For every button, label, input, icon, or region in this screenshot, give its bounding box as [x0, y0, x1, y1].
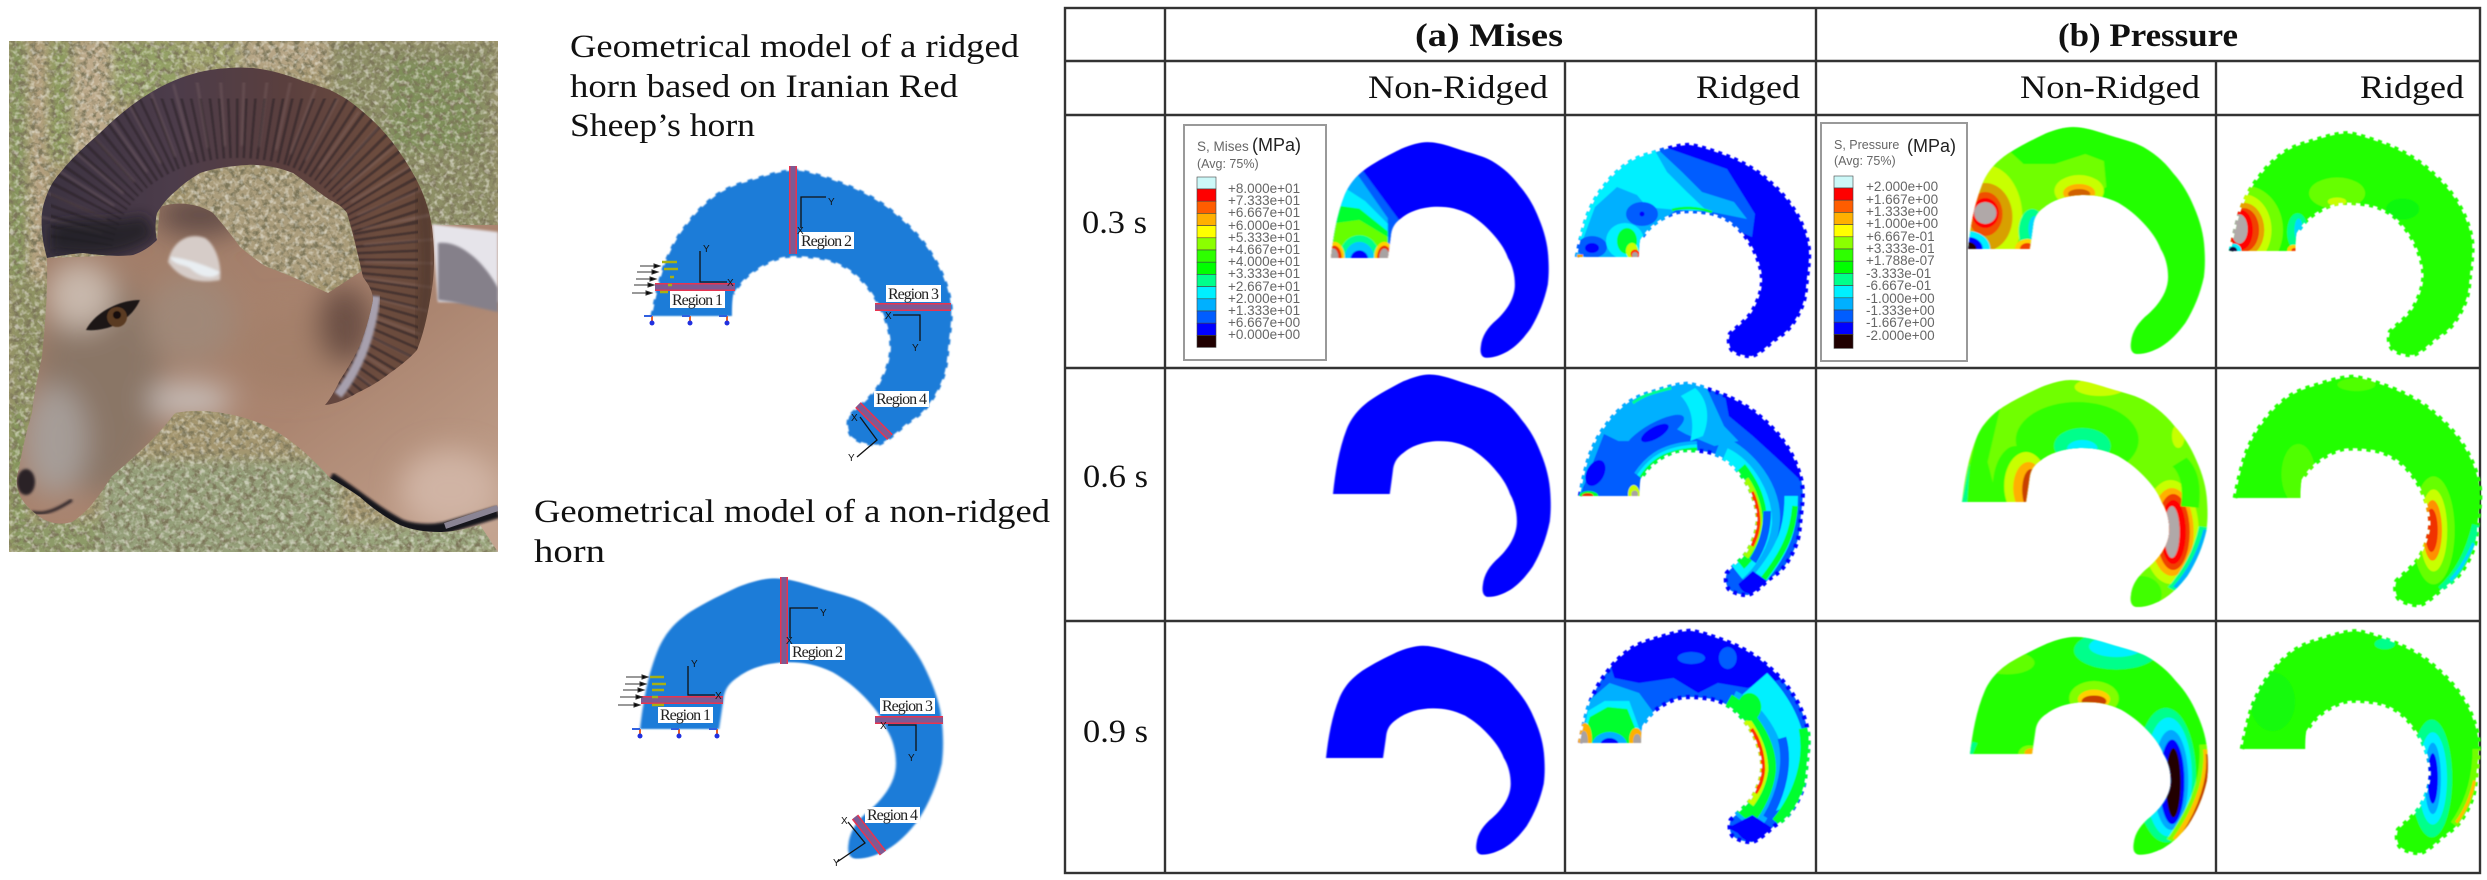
contour: Mises ridged 0.9 s — [1578, 627, 1809, 842]
grey-white back patch — [438, 243, 498, 312]
region labels: Region 1 — [660, 707, 711, 724]
contour: Mises non-ridged 0.6 s — [1333, 374, 1551, 597]
scale values: +6.667e+00 — [1228, 315, 1300, 330]
scale values: +0.000e+00 — [1228, 327, 1300, 342]
table grid — [1065, 8, 2480, 873]
scale values: +1.667e+00 — [1866, 192, 1938, 207]
legend: Mises: (Avg: 75%) — [1197, 157, 1259, 171]
local axes — [700, 197, 920, 457]
contour: Pressure ridged 0.9 s — [2242, 631, 2479, 853]
region cut bars — [641, 577, 943, 853]
scale values — [1866, 179, 1938, 343]
region cut bars — [655, 166, 951, 437]
contour: Pressure ridged 0.3 s — [2208, 133, 2472, 355]
scale values: +5.333e+01 — [1228, 230, 1300, 245]
scale values: -6.667e-01 — [1866, 278, 1931, 293]
contour: Mises ridged 0.3 s — [1571, 142, 1809, 356]
boundary symbols — [660, 262, 678, 292]
contour: Mises non-ridged 0.3 s — [1324, 142, 1549, 358]
colour scale — [1834, 176, 1853, 348]
row label: 0.6 s: 0.6 s — [1083, 459, 1148, 495]
legend: Mises: (MPa) — [1252, 135, 1301, 155]
geometrical model: non-ridged horn: X — [880, 721, 887, 732]
geometrical model: ridged horn — [632, 166, 951, 464]
geometrical model: non-ridged horn: Y — [908, 753, 915, 764]
local axes — [688, 608, 916, 862]
contour: Pressure ridged 0.6 s — [2235, 377, 2480, 605]
scale values — [1228, 181, 1300, 342]
geometrical model: non-ridged horn: X — [841, 816, 848, 827]
region labels: Region 4 — [876, 391, 927, 408]
contour: Pressure non-ridged 0.9 s — [1970, 631, 2208, 855]
caption: non-ridged horn: Geometrical model of a non-ridged — [534, 494, 1051, 530]
legend: Pressure: S, Pressure — [1834, 138, 1899, 152]
geometrical model: ridged horn: Y — [828, 197, 835, 208]
ridged horn shape — [652, 170, 951, 445]
geometrical model: ridged horn: Y — [912, 343, 919, 354]
region labels — [670, 232, 941, 408]
geometrical model: non-ridged horn: X — [786, 636, 793, 647]
scale values: +1.333e+00 — [1866, 204, 1938, 219]
horn — [30, 60, 440, 410]
scale values: -1.667e+00 — [1866, 315, 1935, 330]
scale values: +2.667e+01 — [1228, 279, 1300, 294]
table heading: (b) Pressure: (b) Pressure — [2058, 18, 2238, 54]
caption: ridged horn: Sheep’s horn — [570, 108, 755, 144]
scale values: +1.000e+00 — [1866, 216, 1938, 231]
scale values: +4.667e+01 — [1228, 242, 1300, 257]
scale values: -3.333e-01 — [1866, 266, 1931, 281]
scale values: +6.667e+01 — [1228, 205, 1300, 220]
column heading: Non-Ridged Mises: Non-Ridged — [1368, 70, 1549, 106]
caption: ridged horn: horn based on Iranian Red — [570, 69, 959, 105]
scale values: +4.000e+01 — [1228, 254, 1300, 269]
legend: Pressure — [1821, 123, 1967, 361]
scale values: +2.000e+00 — [1866, 179, 1938, 194]
caption: ridged horn: Geometrical model of a ridged — [570, 29, 1020, 65]
dark belly edge — [330, 478, 498, 530]
region labels: Region 4 — [867, 807, 918, 824]
scale values: +6.667e-01 — [1866, 229, 1935, 244]
eye — [86, 300, 140, 330]
region labels: Region 2 — [801, 233, 852, 250]
geometrical model: non-ridged horn: Y — [820, 608, 827, 619]
contour: Mises non-ridged 0.9 s — [1326, 646, 1545, 855]
geometrical model: ridged horn: Y — [703, 244, 710, 255]
geometrical model: ridged horn: X — [797, 226, 804, 237]
white background patch behind horn tip — [432, 224, 498, 302]
scale values: +6.000e+01 — [1228, 218, 1300, 233]
boundary symbols — [650, 677, 666, 705]
colour scale — [1197, 177, 1216, 347]
photo: Iranian red sheep with ridged horn — [9, 41, 500, 560]
contour: Mises ridged 0.6 s — [1579, 380, 1810, 595]
row label: 0.3 s: 0.3 s — [1082, 205, 1147, 241]
scale values: +1.788e-07 — [1866, 253, 1935, 268]
geometrical model: ridged horn: X — [851, 413, 858, 424]
region labels: Region 2 — [792, 644, 843, 661]
scale values: +1.333e+01 — [1228, 303, 1300, 318]
ram head and body — [9, 190, 500, 552]
scale values: -1.000e+00 — [1866, 291, 1935, 306]
scale values: +3.333e+01 — [1228, 266, 1300, 281]
column heading: Ridged Mises: Ridged — [1696, 70, 1801, 106]
ear — [168, 236, 220, 281]
caption: ridged horn — [570, 29, 1020, 144]
legend: Mises — [1184, 125, 1326, 360]
region labels: Region 3 — [888, 286, 939, 303]
scale values: +8.000e+01 — [1228, 181, 1300, 196]
geometrical model: ridged horn: X — [885, 311, 892, 322]
legend: Pressure: (MPa) — [1907, 136, 1956, 156]
load arrows — [618, 675, 648, 707]
region labels: Region 3 — [882, 698, 933, 715]
scale values: -1.333e+00 — [1866, 303, 1935, 318]
geometrical model: non-ridged horn: Y — [833, 858, 840, 869]
scale values: -2.000e+00 — [1866, 328, 1935, 343]
geometrical model: ridged horn: Y — [848, 453, 855, 464]
column heading: Non-Ridged Pressure: Non-Ridged — [2020, 70, 2201, 106]
column heading: Ridged Pressure: Ridged — [2360, 70, 2465, 106]
caption: non-ridged horn: horn — [534, 534, 605, 570]
scale values: +7.333e+01 — [1228, 193, 1300, 208]
load arrows — [632, 264, 660, 295]
geometrical model: ridged horn: X — [727, 278, 734, 289]
region labels: Region 1 — [672, 292, 723, 309]
table heading: (a) Mises: (a) Mises — [1415, 18, 1563, 54]
legend: Pressure: (Avg: 75%) — [1834, 154, 1896, 168]
geometrical model: non-ridged horn: Y — [691, 659, 698, 670]
contour: Pressure non-ridged 0.6 s — [1962, 378, 2208, 612]
legend: Mises: S, Mises — [1197, 139, 1249, 154]
geometrical model: non-ridged horn — [618, 577, 943, 869]
scale values: +2.000e+01 — [1228, 291, 1300, 306]
geometrical model: non-ridged horn: X — [715, 691, 722, 702]
region labels — [658, 644, 935, 824]
non-ridged horn shape — [640, 578, 943, 859]
nose and mouth — [17, 469, 35, 495]
contour: Pressure non-ridged 0.3 s — [1967, 126, 2206, 355]
scale values: +3.333e-01 — [1866, 241, 1935, 256]
caption: non-ridged horn — [534, 494, 1051, 570]
row label: 0.9 s: 0.9 s — [1083, 714, 1148, 750]
